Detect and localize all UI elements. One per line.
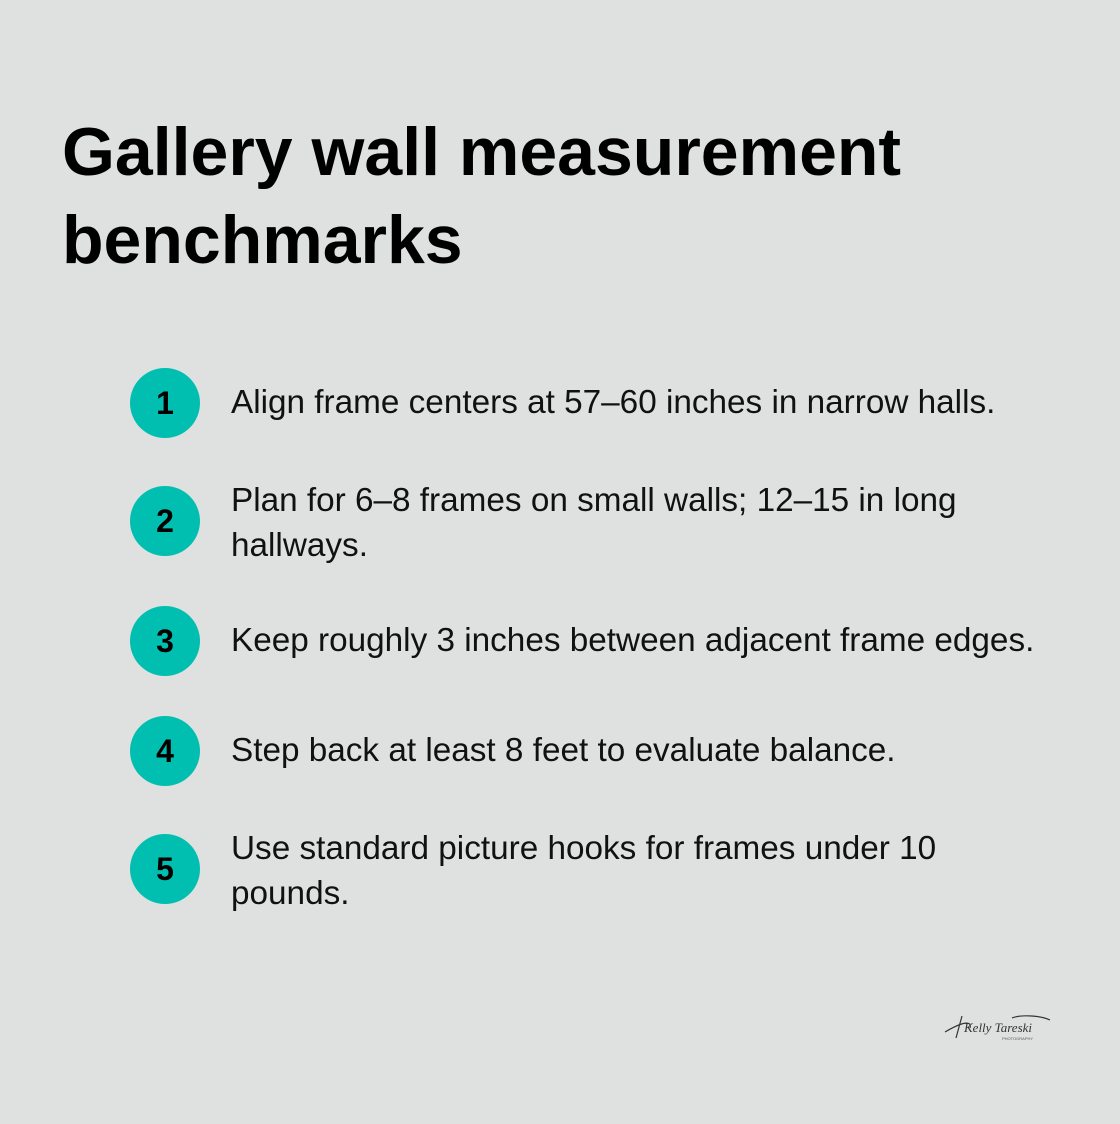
item 1: 1	[156, 385, 174, 421]
item 2: Plan for 6–8 frames on small walls; 12–15 in long hallways.	[231, 482, 957, 564]
title	[62, 114, 901, 278]
item 1	[130, 368, 995, 438]
item 1: Align frame centers at 57–60 inches in narrow halls.	[231, 384, 995, 421]
logo signature: Kelly Tareski	[963, 1020, 1032, 1035]
title: benchmarks	[62, 202, 463, 278]
logo signature: PHOTOGRAPHY	[1002, 1036, 1033, 1041]
item 3: Keep roughly 3 inches between adjacent frame edges.	[231, 622, 1034, 659]
item 4: 4	[156, 733, 174, 769]
item 2: 2	[156, 503, 174, 539]
item 4	[130, 716, 896, 786]
item 5: 5	[156, 851, 174, 887]
item 3	[130, 606, 1034, 676]
item 5: Use standard picture hooks for frames under 10 pounds.	[231, 830, 936, 912]
title: Gallery wall measurement	[62, 114, 901, 190]
item 3: 3	[156, 623, 174, 659]
item 4: Step back at least 8 feet to evaluate balance.	[231, 732, 896, 769]
logo signature	[944, 1015, 1050, 1041]
